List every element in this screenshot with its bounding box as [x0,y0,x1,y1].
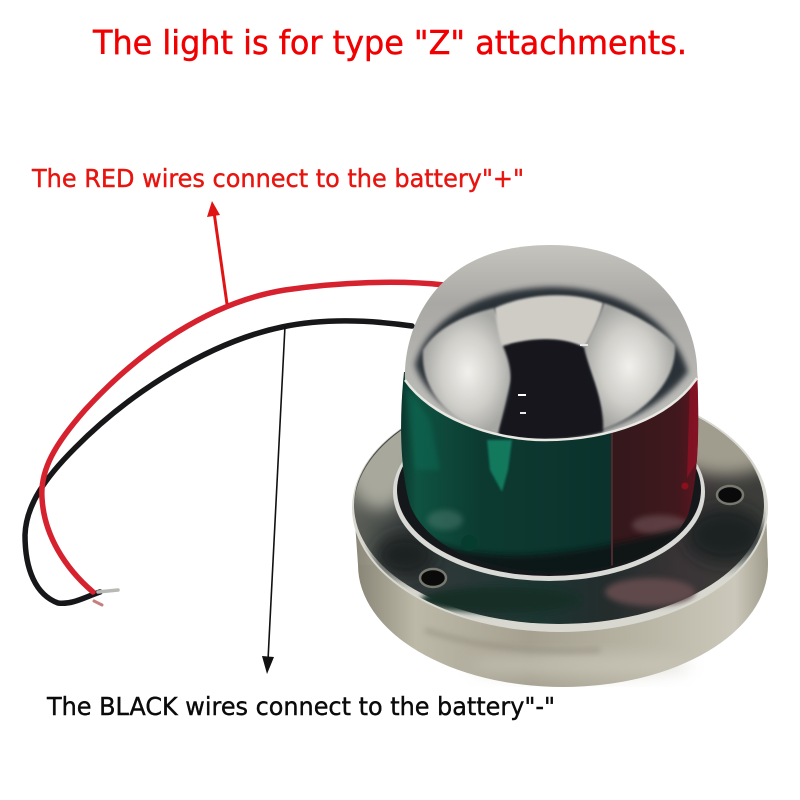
base flange side [354,443,768,687]
red wire label: The RED wires connect to the battery"+" [31,164,524,193]
black wire tip [94,590,118,605]
black wire label: The BLACK wires connect to the battery"-" [46,692,555,721]
base flange top face [352,416,768,632]
mounting holes [420,486,743,587]
black arrow [262,326,285,674]
dome reflections [415,287,688,440]
red arrow [207,201,227,304]
black wire [25,321,412,605]
navigation light [342,245,795,687]
lens reflections [405,380,698,580]
lens collar [393,403,705,581]
title: The light is for type "Z" attachments. [92,23,687,62]
lens [401,372,698,572]
stainless dome [405,245,697,440]
red wire [42,282,444,592]
